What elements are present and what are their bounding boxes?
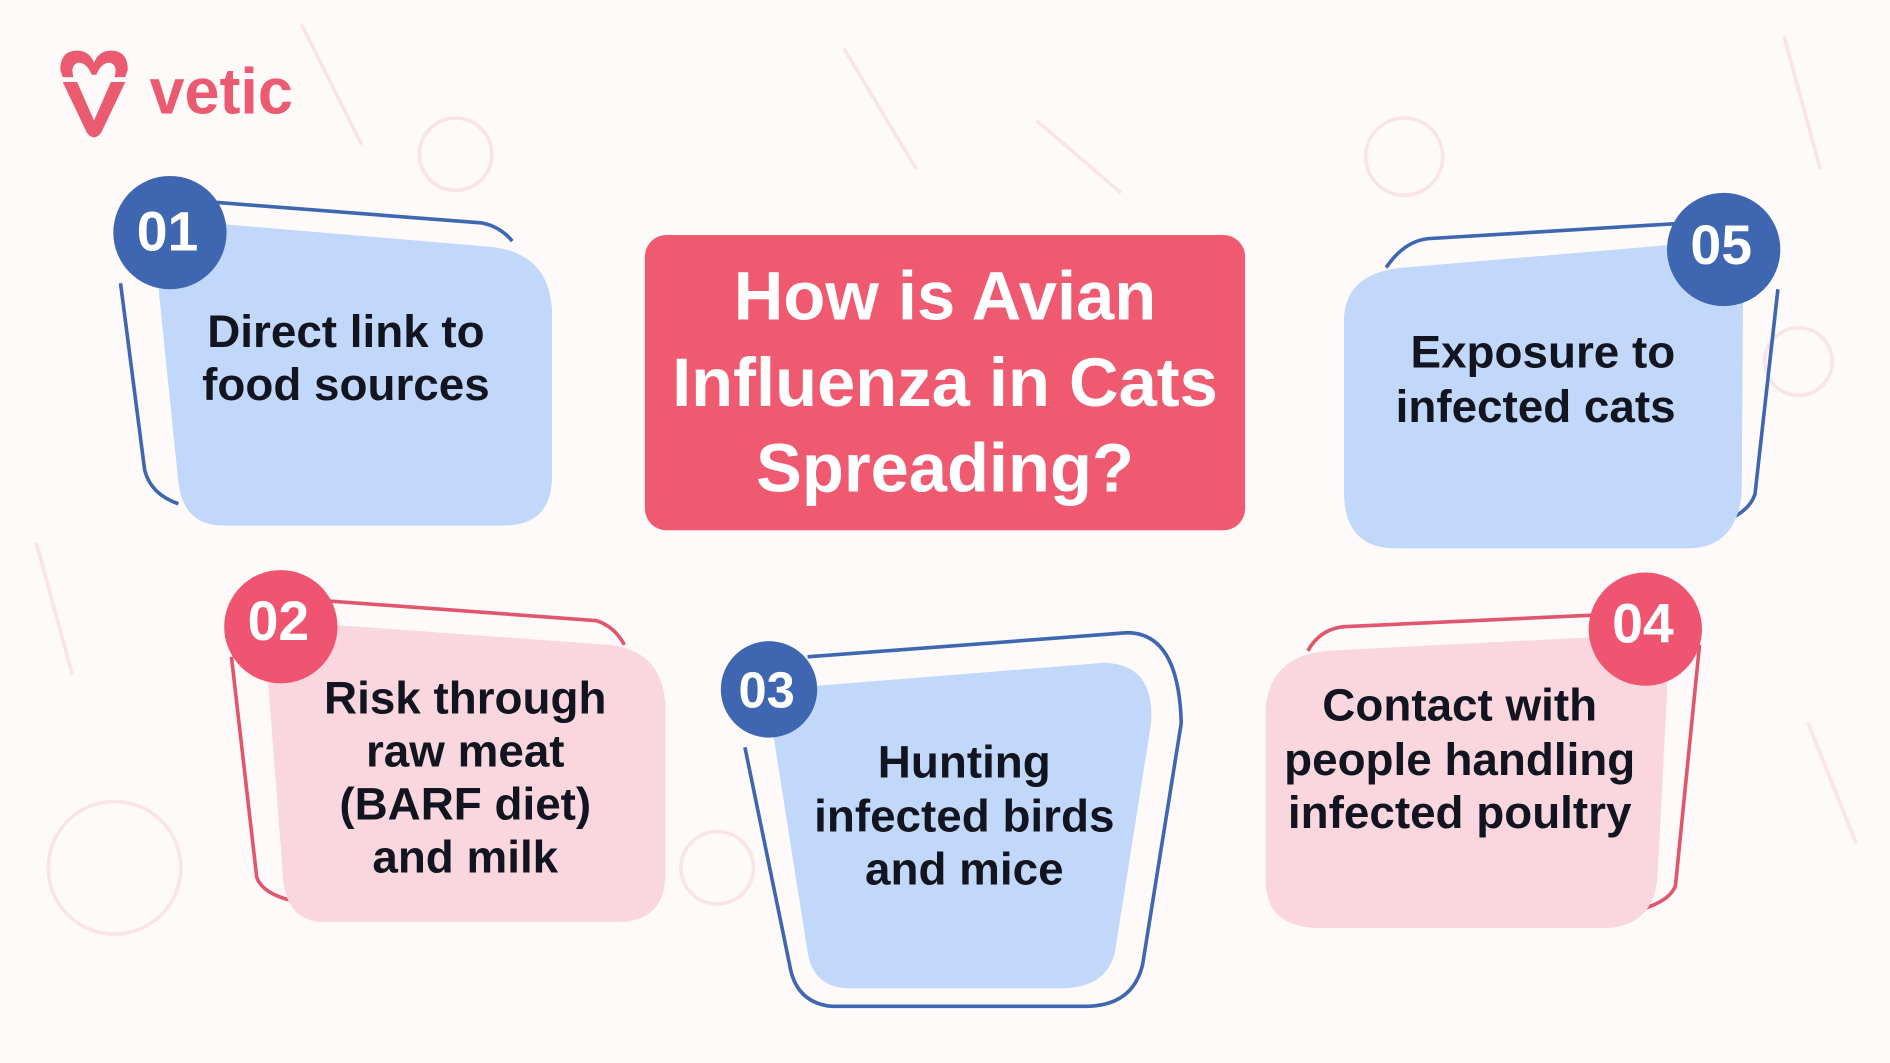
card 02: [224, 570, 665, 922]
card 03: infected birds: [814, 791, 1114, 842]
card 04: [1266, 572, 1702, 928]
badge 02: 02: [248, 590, 309, 652]
card 04: people handling: [1284, 734, 1635, 785]
badge 03: 03: [738, 661, 795, 718]
title box: [645, 235, 1245, 530]
badge 04: [1589, 572, 1702, 686]
card 02: Risk through: [324, 672, 606, 723]
badge 05: [1667, 193, 1780, 306]
card 03: [721, 633, 1181, 1006]
badge 03: [721, 641, 817, 738]
card 01: food sources: [202, 359, 490, 410]
title box: How is Avian: [734, 257, 1156, 334]
card 05: Exposure to: [1411, 327, 1675, 378]
title box: Influenza in Cats: [672, 344, 1218, 421]
logo: vetic: [60, 51, 293, 137]
title box: Spreading?: [756, 430, 1134, 507]
card 04: infected poultry: [1288, 787, 1632, 838]
card 01: Direct link to: [207, 306, 485, 357]
card 05: infected cats: [1396, 381, 1676, 432]
card 02: raw meat: [366, 726, 565, 777]
badge 05: 05: [1690, 214, 1752, 276]
card 03: and mice: [865, 844, 1064, 895]
icon: heart V: [60, 51, 128, 137]
badge 02: [224, 570, 338, 683]
card 01: [113, 176, 552, 525]
card 02: and milk: [372, 832, 559, 883]
card 03: Hunting: [878, 736, 1051, 787]
badge 01: 01: [137, 201, 198, 263]
badge 01: [113, 176, 227, 289]
card 04: Contact with: [1322, 680, 1597, 731]
badge 04: 04: [1612, 592, 1674, 654]
card 02: (BARF diet): [339, 779, 591, 830]
logo text: vetic: [149, 54, 293, 127]
card 05: [1344, 193, 1780, 548]
